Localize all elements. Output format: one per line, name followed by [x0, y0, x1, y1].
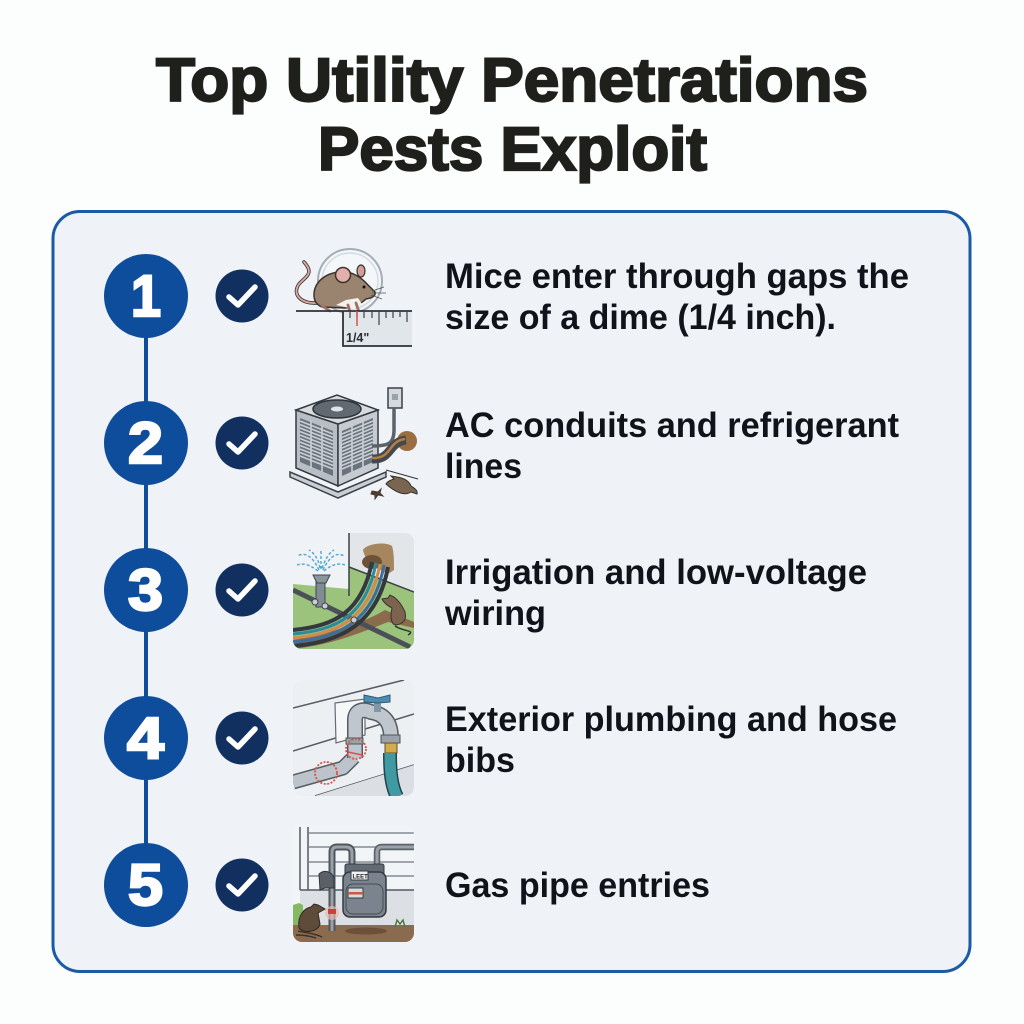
icon: mouse at a quarter-inch gap with ruler — [296, 249, 412, 346]
number badge 3 — [104, 548, 188, 632]
number badge 4 — [104, 696, 188, 780]
step 2 text — [445, 406, 899, 486]
icon: gas meter and pipe entry — [293, 826, 414, 942]
check icon 2 — [216, 416, 268, 470]
icon: mouse at a quarter-inch gap with ruler: 1/4" — [346, 331, 369, 345]
step 2 — [104, 388, 899, 499]
step 4 text: Exterior plumbing and hose — [445, 700, 897, 739]
number badge 1 — [104, 254, 188, 338]
step 4 — [104, 680, 897, 797]
step 3 — [104, 533, 867, 649]
step 1 — [104, 249, 909, 346]
timeline connector — [144, 296, 148, 885]
check icon 1 — [216, 270, 268, 322]
check icon 5 — [216, 858, 268, 912]
number badge 2 — [104, 401, 188, 485]
step 1 text: Mice enter through gaps the — [445, 257, 909, 296]
check icon 3 — [216, 564, 268, 616]
step 4 text: bibs — [445, 741, 515, 780]
icon: hose bib and exterior plumbing — [293, 680, 414, 797]
number badge 4: 4 — [127, 706, 164, 771]
number badge 2: 2 — [128, 411, 163, 476]
number badge 3: 3 — [128, 558, 163, 623]
step 1 text — [445, 257, 909, 337]
step 1 text: size of a dime (1/4 inch). — [445, 298, 836, 337]
step 3 text: Irrigation and low-voltage — [445, 553, 867, 592]
step 4 text — [445, 700, 897, 780]
step 3 text: wiring — [444, 594, 546, 633]
number badge 5: 5 — [128, 853, 163, 918]
icon: irrigation pipe and wiring bundle — [293, 533, 414, 649]
check icon 4 — [216, 712, 268, 764]
icon: AC condenser with conduit entry — [290, 388, 418, 499]
title: Top Utility Penetrations — [156, 46, 868, 114]
step 2 text: lines — [445, 447, 522, 486]
title: Pests Exploit — [318, 115, 707, 183]
icon: gas meter and pipe entry: LEET — [352, 874, 368, 880]
step 3 text — [444, 553, 867, 633]
panel: checklist — [53, 212, 970, 972]
number badge 5 — [104, 843, 188, 927]
step 5 text: Gas pipe entries — [445, 866, 710, 905]
number badge 1: 1 — [131, 264, 161, 329]
step 5 — [104, 826, 710, 942]
step 2 text: AC conduits and refrigerant — [445, 406, 899, 445]
title — [156, 46, 868, 183]
